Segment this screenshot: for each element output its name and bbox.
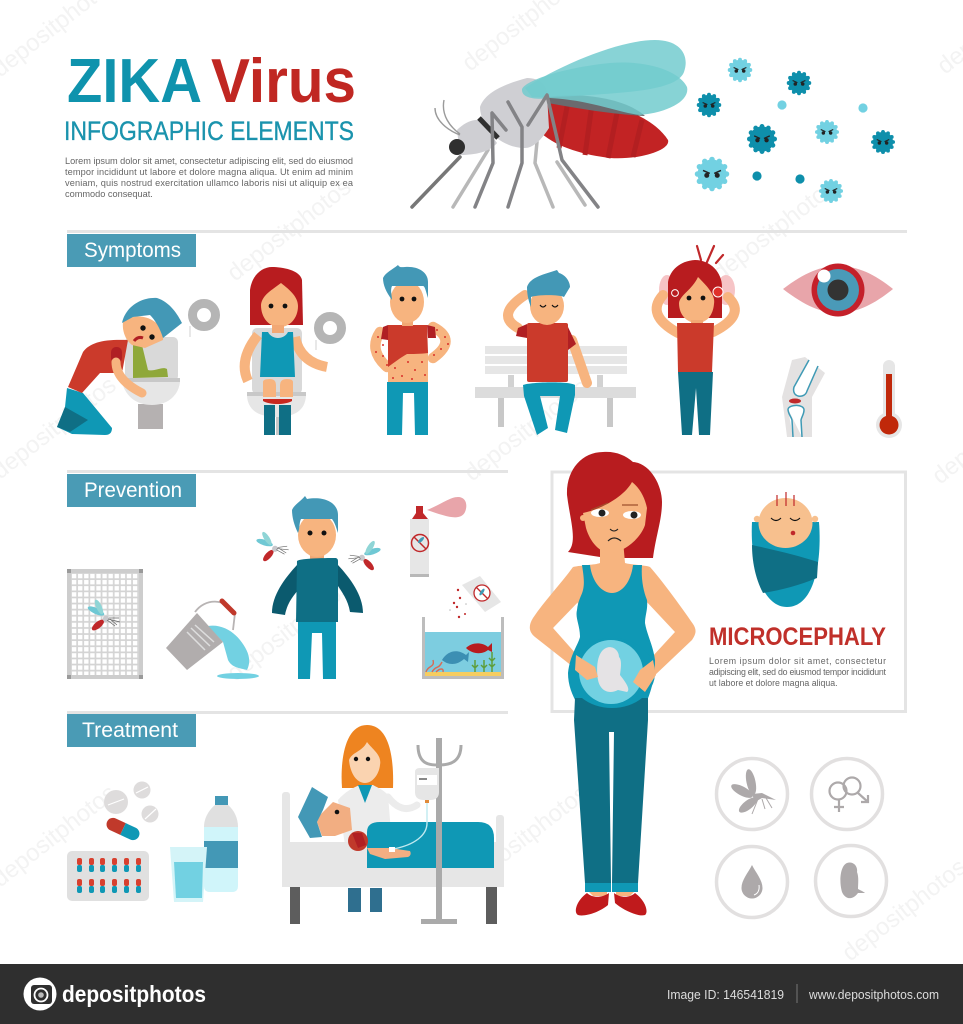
watermarks: depositphotos bbox=[222, 173, 356, 287]
glass of water bbox=[170, 847, 207, 902]
wings bbox=[525, 40, 686, 97]
image id: Image ID: 146541819 bbox=[667, 988, 784, 1002]
abdomen bbox=[541, 98, 668, 158]
symptom: joint pain bbox=[782, 357, 825, 437]
depositphotos logo: depositphotos bbox=[62, 981, 206, 1007]
heading: Treatment bbox=[67, 714, 196, 747]
antennae bbox=[435, 100, 460, 135]
frame bbox=[552, 472, 906, 712]
icon: blood transmission bbox=[716, 846, 788, 918]
far legs bbox=[453, 142, 585, 207]
title: ZIKA Virus: ZIKA bbox=[67, 47, 202, 116]
intro text: commodo consequat. bbox=[65, 189, 153, 199]
tank top bbox=[568, 565, 655, 705]
face bbox=[583, 482, 647, 553]
icon: mosquito transmission bbox=[716, 758, 788, 830]
panel: treatment bbox=[67, 725, 504, 924]
title: ZIKA Virus: Virus bbox=[211, 47, 356, 116]
heading: MICROCEPHALY: MICROCEPHALY bbox=[709, 623, 886, 651]
shoes bbox=[589, 892, 634, 896]
neck and shoulders bbox=[573, 540, 650, 605]
watermarks: depositphotos bbox=[707, 173, 841, 287]
symptom: vomiting bbox=[57, 298, 216, 435]
window net bbox=[67, 569, 143, 679]
microcephaly text: adipiscing elit, sed do eiusmod tempor incididunt bbox=[709, 667, 887, 677]
intro text bbox=[65, 156, 354, 199]
symptom: fatigue on bench bbox=[475, 270, 636, 435]
symptom: fever thermometer bbox=[876, 360, 902, 438]
intro text: Lorem ipsum dolor sit amet, consectetur adipiscing elit, sed do eiusmod bbox=[65, 156, 353, 166]
arms bbox=[530, 567, 598, 680]
divider lines bbox=[67, 230, 907, 714]
symptom: diarrhoea bbox=[245, 267, 342, 435]
title: ZIKA Virus bbox=[67, 47, 356, 116]
symptom: red eye bbox=[783, 264, 893, 316]
pills and capsule bbox=[104, 782, 158, 842]
larvicide packet bbox=[449, 576, 501, 618]
near legs and proboscis bbox=[412, 157, 460, 207]
IV drip stand bbox=[389, 738, 461, 924]
bucket pouring water bbox=[166, 601, 259, 679]
pregnant woman bbox=[530, 452, 696, 915]
microcephaly text: ut labore et dolore magna aliqua. bbox=[709, 678, 838, 688]
symptom: skin rash bbox=[375, 265, 449, 435]
heading: Prevention bbox=[67, 474, 196, 507]
microcephaly text bbox=[709, 656, 887, 688]
footer bar bbox=[0, 964, 963, 1024]
virus particles bbox=[695, 58, 895, 203]
panel: symptoms bbox=[57, 246, 902, 438]
watermarks: depositphotos bbox=[222, 573, 356, 687]
watermarks: depositphotos bbox=[459, 373, 593, 487]
depositphotos logo bbox=[24, 978, 206, 1010]
doctor bbox=[338, 725, 417, 912]
thorax and head bbox=[480, 78, 549, 148]
icon: sexual transmission bbox=[812, 758, 882, 830]
panel: microcephaly bbox=[530, 452, 906, 915]
blister pack bbox=[67, 851, 149, 901]
intro text: veniam, quis nostrud exercitation ullamco laboris nisi ut aliquip ex ea bbox=[65, 178, 354, 188]
heading: Symptoms: Symptoms bbox=[84, 239, 181, 262]
water bottle bbox=[204, 796, 238, 892]
mosquito illustration bbox=[412, 40, 687, 207]
title block bbox=[64, 47, 356, 199]
symptom: headache bbox=[657, 246, 735, 435]
watermarks: depositphotos bbox=[459, 779, 593, 893]
belly and fetus bbox=[569, 638, 655, 708]
man with mosquitoes bbox=[254, 496, 383, 679]
heading: Symptoms bbox=[67, 234, 196, 267]
icon: fetus transmission bbox=[816, 846, 886, 916]
subtitle: INFOGRAPHIC ELEMENTS bbox=[64, 116, 354, 146]
repellent spray bbox=[410, 497, 466, 577]
website: www.depositphotos.com bbox=[808, 988, 939, 1002]
aquarium bbox=[424, 617, 502, 678]
trousers bbox=[574, 698, 648, 883]
baby icon bbox=[752, 492, 820, 607]
heading: Treatment: Treatment bbox=[82, 719, 178, 742]
hair bbox=[567, 452, 662, 558]
panel: prevention bbox=[67, 496, 502, 679]
hospital bed with patient bbox=[282, 787, 504, 924]
microcephaly text: Lorem ipsum dolor sit amet, consectetur bbox=[709, 656, 886, 666]
heading: Prevention: Prevention bbox=[84, 479, 182, 502]
intro text: tempor incididunt ut labore et dolore magna aliqua. Ut enim ad minim bbox=[65, 167, 353, 177]
